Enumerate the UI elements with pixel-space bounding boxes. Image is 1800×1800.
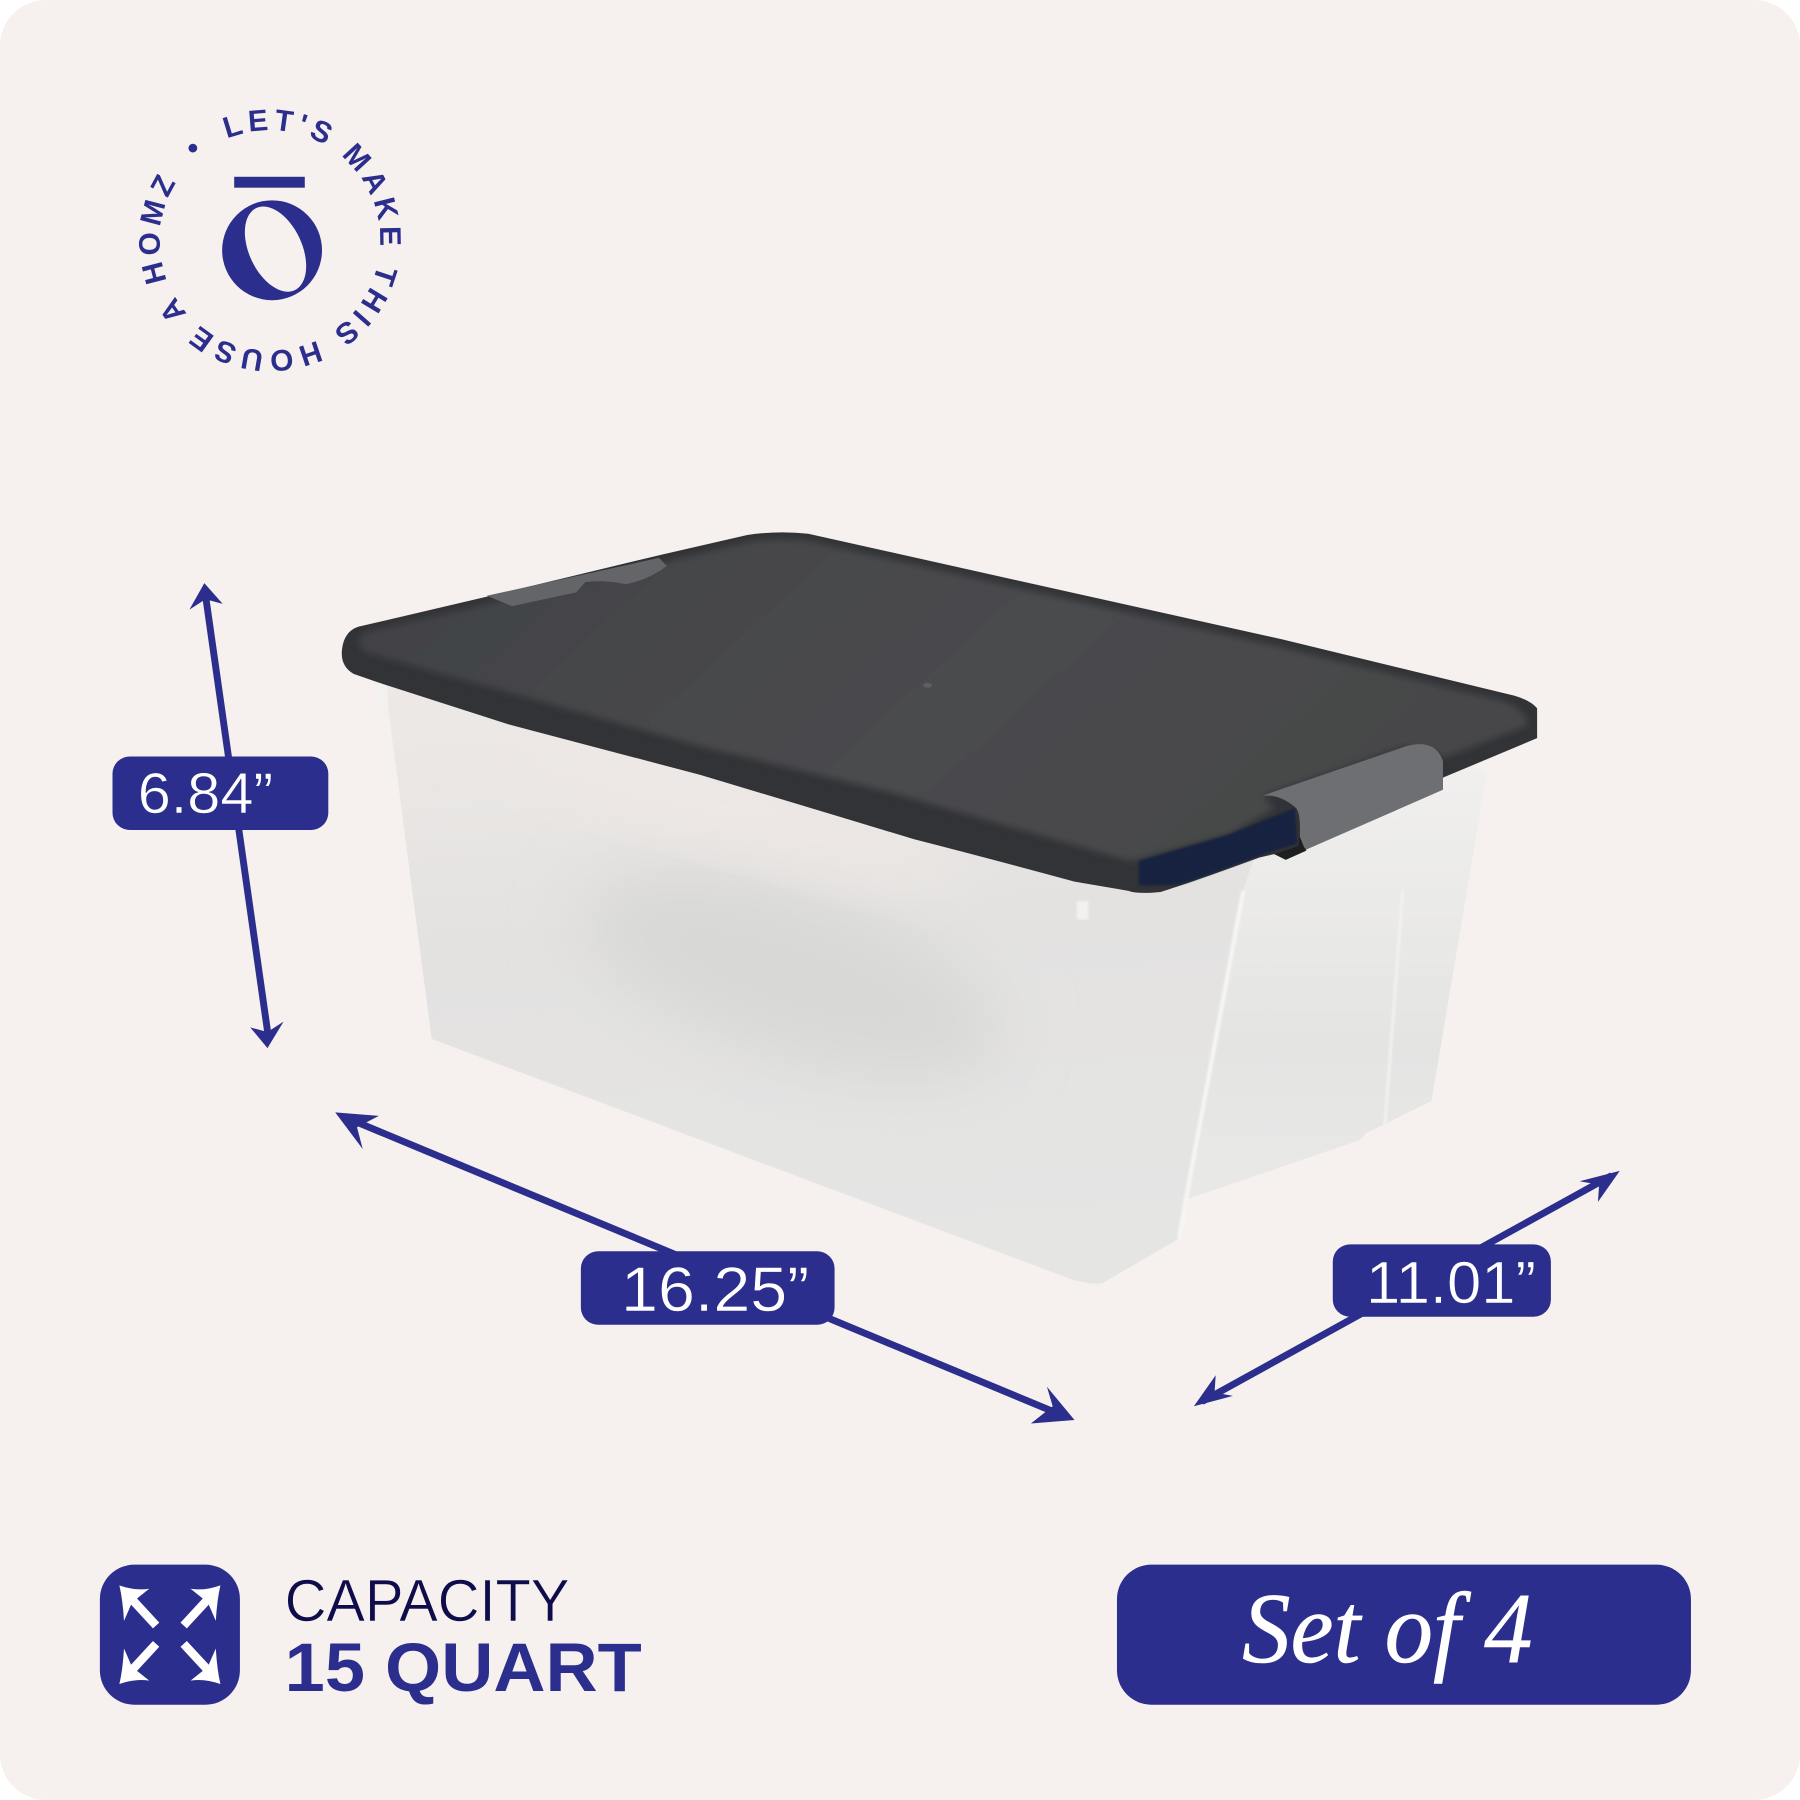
box front shading bbox=[618, 884, 966, 1060]
set of 4 badge bbox=[1117, 1565, 1691, 1705]
width arrow line bbox=[1202, 1176, 1612, 1402]
circular slogan text: LET'S MAKE THIS HOUSE A HOMZ bbox=[138, 109, 401, 372]
latch hook bbox=[1274, 836, 1306, 860]
back latch bbox=[487, 558, 667, 606]
slogan dot bbox=[188, 144, 197, 152]
box rim detail bbox=[377, 682, 389, 715]
height label bbox=[112, 757, 328, 830]
logo macron bar bbox=[234, 177, 305, 188]
length label: 16.25” bbox=[621, 1255, 809, 1325]
box corner highlight bbox=[1179, 891, 1243, 1239]
set of 4 badge: Set of 4 bbox=[1242, 1572, 1533, 1684]
box clip mark bbox=[1077, 901, 1088, 920]
storage box product bbox=[342, 532, 1537, 1284]
length arrow heads bbox=[335, 1112, 1074, 1423]
width arrow heads bbox=[1194, 1171, 1620, 1406]
length label bbox=[581, 1251, 835, 1325]
logo letter o bbox=[222, 197, 322, 301]
box side rib bbox=[1384, 890, 1403, 1131]
height dimension arrow bbox=[112, 583, 328, 1048]
length arrow line bbox=[344, 1117, 1065, 1417]
front latch bbox=[1263, 744, 1443, 849]
box body front panel bbox=[377, 682, 1257, 1284]
capacity block bbox=[100, 1565, 642, 1706]
lid silhouette bbox=[342, 532, 1537, 893]
capacity label: CAPACITY bbox=[285, 1567, 569, 1634]
lid top surface bbox=[359, 539, 1527, 861]
height arrow heads bbox=[189, 583, 284, 1048]
width dimension arrow bbox=[1194, 1171, 1620, 1406]
brand logo badge bbox=[138, 109, 401, 372]
box body side panel bbox=[1179, 758, 1487, 1239]
length dimension arrow bbox=[335, 1112, 1074, 1423]
height arrow line bbox=[205, 591, 269, 1039]
capacity value: 15 QUART bbox=[285, 1629, 642, 1706]
lid mark bbox=[923, 683, 932, 688]
width label: 11.01” bbox=[1366, 1249, 1536, 1316]
capacity icon bbox=[100, 1565, 240, 1705]
lid navy edge bbox=[1139, 808, 1297, 885]
height label: 6.84” bbox=[138, 762, 273, 826]
